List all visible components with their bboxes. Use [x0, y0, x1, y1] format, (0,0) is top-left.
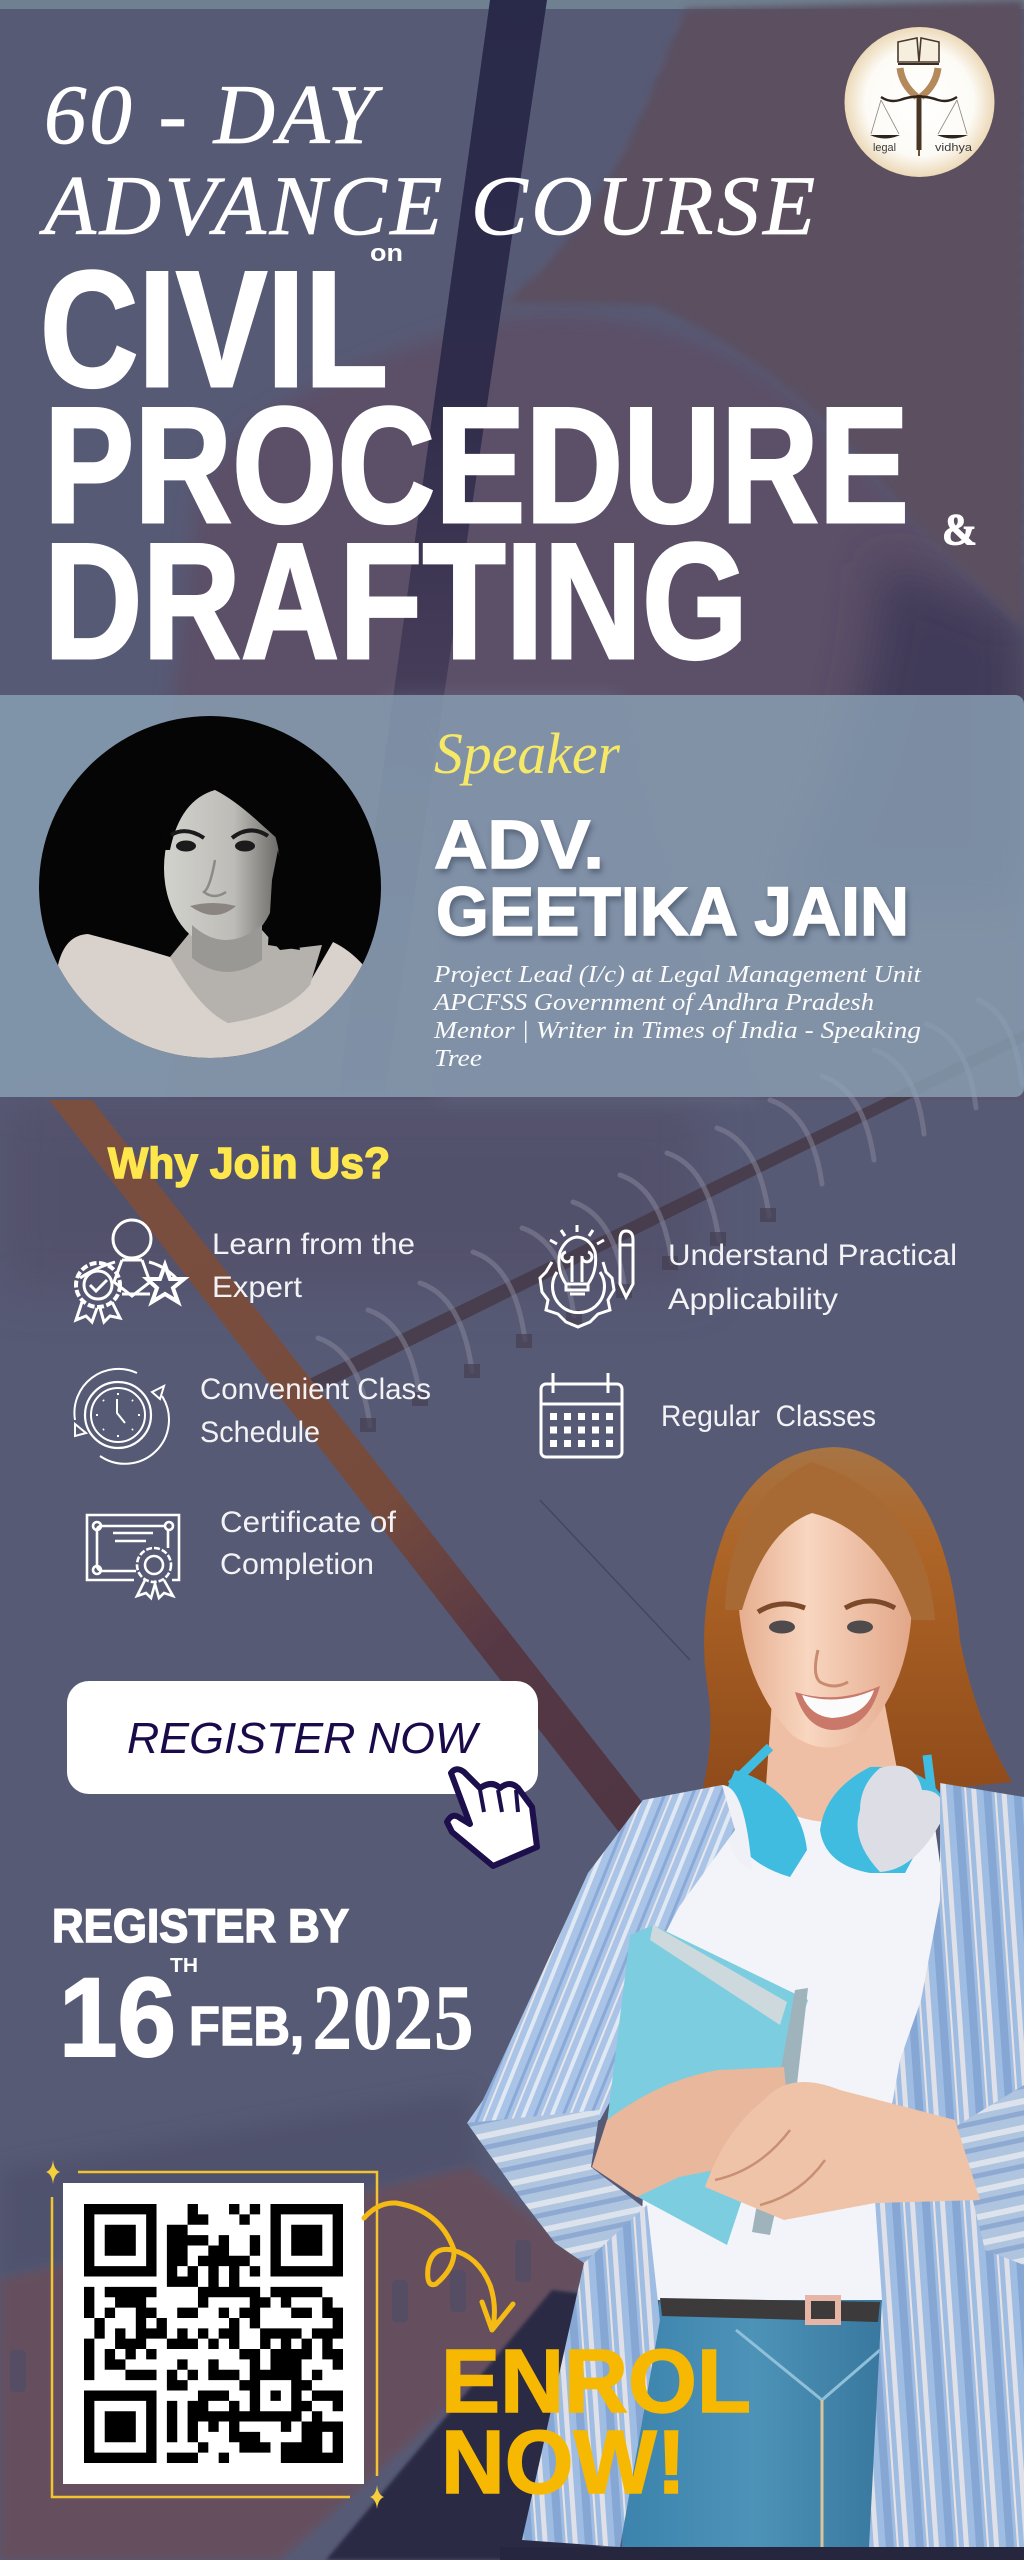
text: learn from the expert: Expert [212, 1271, 303, 1304]
neck [765, 1700, 900, 1822]
text: regular classes: Regular Classes [661, 1400, 876, 1433]
hair [702, 1447, 1012, 1800]
heading: why join us: Why Join Us? [108, 1139, 390, 1188]
text: convenient class schedule [200, 1373, 431, 1449]
text: convenient class schedule: Convenient Class [200, 1373, 431, 1406]
button: register now [67, 1681, 538, 1794]
text: understand practical applicability: Understand Practical [668, 1239, 957, 1272]
text: speaker bio: APCFSS Government of Andhra Pradesh [432, 990, 874, 1016]
jeans [622, 2300, 882, 2547]
icon: open book [898, 38, 939, 62]
arrow: gold curly arrow from qr code to enrol now [364, 2203, 513, 2330]
heading: civil procedure and drafting [40, 237, 909, 693]
text: convenient class schedule: Schedule [200, 1416, 320, 1449]
text: register now: REGISTER NOW [127, 1714, 481, 1763]
icon: calendar [541, 1373, 622, 1457]
panel: speaker band [0, 695, 1024, 1097]
hands [592, 2067, 980, 2220]
heading: civil procedure and drafting: DRAFTING [44, 509, 748, 693]
striped shirt: left side [467, 1785, 735, 2123]
text: speaker name [434, 806, 909, 950]
text: ampersand: & [942, 505, 977, 554]
text: deadline date: FEB, [189, 1995, 304, 2057]
text: understand practical applicability: Applicability [668, 1283, 838, 1316]
text: speaker: Speaker [434, 721, 620, 786]
icon: clock with circular arrows [74, 1369, 169, 1464]
photo: speaker portrait [30, 710, 390, 1070]
striped shirt: right side [869, 1783, 1024, 2547]
title: 60 - day advance course: 60 - DAY [44, 68, 383, 162]
text: understand practical applicability [668, 1239, 957, 1316]
text: speaker name: GEETIKA JAIN [436, 873, 909, 950]
text: certificate of completion: Certificate of [220, 1506, 397, 1539]
notebook [605, 1925, 808, 2245]
text: enrol now: NOW! [441, 2413, 686, 2513]
icon: hands, pen and scales [870, 68, 968, 156]
text: speaker bio: Project Lead (I/c) at Legal Management Unit [433, 962, 922, 988]
text: legal vidhya [873, 142, 973, 154]
text: speaker bio: Mentor | Writer in Times of India - Speaking [433, 1018, 921, 1044]
text: enrol now [441, 2332, 751, 2513]
title: 60 - day advance course [39, 68, 815, 253]
heading: civil procedure and drafting: CIVIL [40, 237, 388, 421]
qr code [84, 2204, 343, 2463]
text: deadline date: 2025 [312, 1966, 474, 2070]
title: 60 - day advance course: ADVANCE COURSE [39, 159, 815, 253]
icon: certificate [87, 1515, 179, 1598]
text: legal vidhya: vidhya [935, 142, 973, 154]
text: on: on [370, 240, 403, 267]
text: register by: REGISTER BY [52, 1899, 349, 1952]
logo: legal vidhya [844, 27, 994, 177]
text: speaker name: ADV. [434, 806, 604, 883]
text: speaker bio: Tree [434, 1046, 482, 1072]
face [738, 1500, 912, 1748]
panel: qr code with gold frame [46, 2160, 384, 2509]
icon: expert with badge and star [76, 1220, 184, 1322]
text: learn from the expert [212, 1228, 415, 1304]
text: legal vidhya: legal [873, 142, 896, 154]
text: speaker bio [432, 962, 922, 1072]
icon: pointing hand cursor [447, 1769, 537, 1866]
illustration: student holding a notebook [467, 1447, 1024, 2547]
headphones [722, 1747, 944, 1877]
text: certificate of completion: Completion [220, 1548, 374, 1581]
text: deadline date: TH [170, 1955, 198, 1977]
white t-shirt [637, 1790, 945, 2300]
text: learn from the expert: Learn from the [212, 1228, 415, 1261]
text: deadline date [59, 1955, 474, 2080]
icon: lightbulb gear and pencil [540, 1225, 633, 1327]
text: certificate of completion [220, 1506, 397, 1581]
text: deadline date: 16 [59, 1955, 176, 2080]
text: enrol now: ENROL [441, 2332, 751, 2432]
